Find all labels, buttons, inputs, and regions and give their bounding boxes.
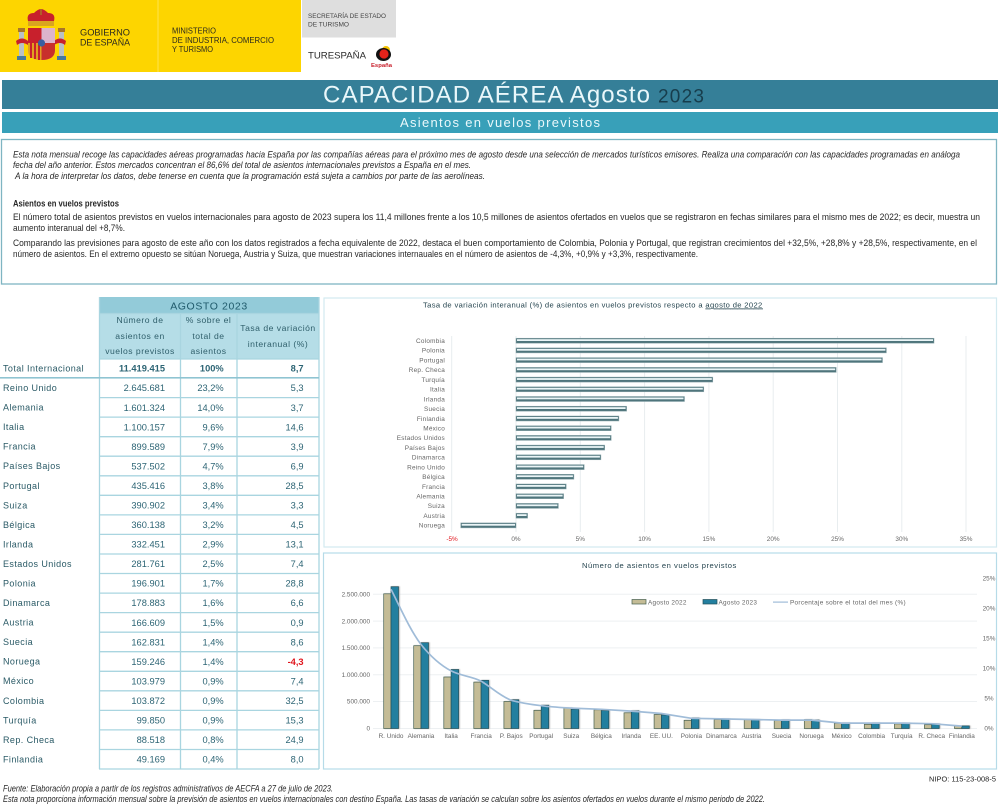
left axis labels: 500.000 bbox=[347, 699, 370, 706]
category labels: Portugal bbox=[529, 733, 553, 740]
icon: Spain sun logo: España bbox=[371, 63, 392, 69]
category labels: EE. UU. bbox=[650, 733, 673, 740]
text block: analysis paragraphs: aumento interanual del +8,7%. bbox=[13, 223, 125, 234]
category labels: Francia bbox=[470, 733, 492, 740]
category labels: Suiza bbox=[563, 733, 580, 740]
title bar: CAPACIDAD AÉREA Agosto bbox=[323, 82, 650, 108]
category labels: Austria bbox=[423, 513, 445, 520]
table rows: countries: 0,9% bbox=[202, 716, 224, 726]
table rows: countries: Italia bbox=[3, 422, 25, 432]
category labels: Noruega bbox=[419, 523, 445, 530]
text: Ministerio: DE INDUSTRIA, COMERCIO bbox=[172, 36, 274, 45]
table rows: countries: 0,9% bbox=[202, 696, 224, 706]
category labels: Austria bbox=[742, 733, 762, 740]
category labels: Dinamarca bbox=[412, 455, 445, 462]
legend bbox=[632, 599, 906, 606]
table header: AGOSTO 2023 bbox=[170, 300, 248, 312]
right axis labels: 15% bbox=[983, 636, 996, 643]
heading: Asientos en vuelos previstos: Asientos en vuelos previstos bbox=[13, 198, 119, 209]
table rows: countries: 0,8% bbox=[202, 735, 224, 745]
category labels: Italia bbox=[444, 733, 458, 740]
category labels: Rep. Checa bbox=[409, 367, 445, 374]
table rows: countries: 6,6 bbox=[291, 598, 304, 608]
icon: coat of arms of Spain bbox=[16, 9, 66, 60]
left axis labels bbox=[342, 592, 370, 733]
table rows: countries: 3,7 bbox=[291, 403, 304, 413]
table rows: countries: 3,8% bbox=[202, 481, 224, 491]
table rows: countries: 7,9% bbox=[202, 442, 224, 452]
table rows: countries: 178.883 bbox=[131, 598, 165, 608]
right axis labels: 20% bbox=[983, 606, 996, 613]
table rows: countries: 537.502 bbox=[131, 461, 165, 471]
table rows: countries: 0,9 bbox=[291, 618, 304, 628]
table rows: countries: 8,6 bbox=[291, 637, 304, 647]
left axis labels: 1.000.000 bbox=[342, 672, 370, 679]
panel: introductory text bbox=[2, 140, 996, 284]
x axis labels: 0% bbox=[511, 536, 521, 543]
table rows: countries: México bbox=[3, 676, 34, 686]
chart title: Número de asientos en vuelos previstos bbox=[582, 561, 737, 570]
right axis labels: 0% bbox=[984, 726, 994, 733]
title bar: 2023 bbox=[658, 86, 704, 108]
table rows: countries bbox=[3, 383, 304, 765]
x axis labels bbox=[446, 536, 973, 543]
table rows: countries: 435.416 bbox=[131, 481, 165, 491]
text block: italic introduction: A la hora de interpretar los datos, debe tenerse en cuenta que la programación está sujeta a cambios por parte de las aerolíneas. bbox=[14, 171, 485, 182]
legend: Agosto 2022 bbox=[648, 599, 687, 606]
table header: total de bbox=[192, 331, 225, 341]
title bar bbox=[2, 80, 998, 109]
category labels bbox=[379, 733, 975, 740]
table rows: countries: Suiza bbox=[3, 500, 28, 510]
right axis labels: 5% bbox=[984, 696, 994, 703]
table rows: countries: 49.169 bbox=[137, 755, 165, 765]
category labels: Suecia bbox=[424, 406, 445, 413]
data table bbox=[0, 297, 319, 769]
category labels: Turquía bbox=[891, 733, 913, 740]
x axis labels: 10% bbox=[638, 536, 651, 543]
table rows: countries: Rep. Checa bbox=[3, 735, 55, 745]
table rows: countries: Portugal bbox=[3, 481, 40, 491]
right axis labels: 10% bbox=[983, 666, 996, 673]
category labels: México bbox=[831, 733, 852, 740]
text: Gobierno de España: GOBIERNO bbox=[80, 26, 130, 38]
category labels: Francia bbox=[422, 484, 445, 491]
table rows: countries: 1,4% bbox=[202, 637, 224, 647]
left axis labels: 2.000.000 bbox=[342, 618, 370, 625]
NIPO code: NIPO: 115-23-008-5 bbox=[929, 774, 996, 784]
text block: analysis paragraphs bbox=[13, 212, 980, 260]
table rows: countries: 332.451 bbox=[131, 540, 165, 550]
table rows: countries: 2,5% bbox=[202, 559, 224, 569]
table rows: countries: 899.589 bbox=[131, 442, 165, 452]
logo: Turespaña: TURESPAÑA bbox=[308, 50, 367, 60]
category labels: Polonia bbox=[681, 733, 703, 740]
header: Secretaría de Estado box: SECRETARÍA DE ESTADO bbox=[308, 11, 386, 20]
x axis labels: 35% bbox=[960, 536, 973, 543]
panel: horizontal bar chart of year-on-year change bbox=[324, 298, 996, 547]
table row: Total Internacional: 100% bbox=[200, 364, 224, 374]
table rows: countries: Turquía bbox=[3, 715, 37, 725]
category labels: Bélgica bbox=[591, 733, 612, 740]
line: percentage of monthly total bbox=[391, 589, 962, 726]
table rows: countries: 281.761 bbox=[131, 559, 165, 569]
panel: column and line chart of seats bbox=[324, 553, 996, 769]
table rows: countries: 162.831 bbox=[131, 637, 165, 647]
table rows: countries: 360.138 bbox=[131, 520, 165, 530]
category labels: Portugal bbox=[419, 357, 445, 364]
category labels: Noruega bbox=[799, 733, 824, 740]
table rows: countries: Bélgica bbox=[3, 520, 35, 530]
table rows: countries: Suecia bbox=[3, 637, 33, 647]
category labels: Finlandia bbox=[949, 733, 975, 740]
table rows: countries: 9,6% bbox=[202, 422, 224, 432]
left axis labels: 0 bbox=[366, 726, 370, 733]
category labels: Colombia bbox=[416, 338, 445, 345]
table rows: countries: 1.601.324 bbox=[124, 403, 165, 413]
table rows: countries: -4,3 bbox=[288, 657, 304, 667]
table rows: countries: 6,9 bbox=[291, 461, 304, 471]
table rows: countries: 8,0 bbox=[291, 755, 304, 765]
table rows: countries: Polonia bbox=[3, 578, 36, 588]
footnotes: Fuente: Elaboración propia a partir de los registros administrativos de AECFA a 27 de julio de 2023. bbox=[3, 784, 333, 794]
table rows: countries: Irlanda bbox=[3, 539, 33, 549]
table rows: countries: 2,9% bbox=[202, 540, 224, 550]
x axis labels: 5% bbox=[576, 536, 585, 543]
table rows: countries: 23,2% bbox=[197, 383, 224, 393]
table rows: countries: 28,8 bbox=[285, 579, 304, 589]
table rows: countries: 99.850 bbox=[137, 716, 165, 726]
category labels: Finlandia bbox=[417, 416, 445, 423]
category labels: Alemania bbox=[416, 494, 445, 500]
category labels: Dinamarca bbox=[706, 733, 737, 740]
table rows: countries: 24,9 bbox=[285, 735, 304, 745]
table rows: countries: 28,5 bbox=[285, 481, 304, 491]
table rows: countries: 88.518 bbox=[137, 735, 165, 745]
table rows: countries: 196.901 bbox=[131, 579, 165, 589]
category labels bbox=[397, 338, 445, 530]
header: Secretaría de Estado box: DE TURISMO bbox=[308, 21, 349, 28]
table rows: countries: Austria bbox=[3, 618, 34, 628]
table rows: countries: Finlandia bbox=[3, 754, 43, 764]
category labels: México bbox=[423, 426, 445, 432]
text: Ministerio: Y TURISMO bbox=[172, 45, 213, 54]
table rows: countries: 15,3 bbox=[285, 716, 304, 726]
table rows: countries: 0,4% bbox=[202, 755, 224, 765]
category labels: Polonia bbox=[422, 348, 445, 355]
category labels: Irlanda bbox=[622, 733, 642, 740]
table rows: countries: 13,1 bbox=[285, 540, 304, 550]
category labels: Reino Unido bbox=[407, 464, 445, 471]
table header: % sobre el bbox=[186, 315, 231, 325]
logo: Turespaña bbox=[308, 46, 392, 69]
table rows: countries: 3,3 bbox=[291, 500, 304, 510]
table rows: countries: 0,9% bbox=[202, 676, 224, 686]
category labels: R. Unido bbox=[379, 733, 404, 740]
table rows: countries: 103.979 bbox=[131, 676, 165, 686]
text block: italic introduction bbox=[13, 150, 960, 182]
table header: vuelos previstos bbox=[105, 346, 175, 356]
legend: Agosto 2023 bbox=[718, 599, 757, 606]
table rows: countries: 1,4% bbox=[202, 657, 224, 667]
subtitle bar bbox=[2, 112, 998, 133]
text: Ministerio: MINISTERIO bbox=[172, 26, 216, 36]
table rows: countries: 7,4 bbox=[291, 559, 304, 569]
table rows: countries: 4,7% bbox=[202, 461, 224, 471]
left axis labels: 2.500.000 bbox=[342, 592, 370, 598]
table rows: countries: Reino Unido bbox=[3, 383, 57, 393]
table rows: countries: 3,2% bbox=[202, 520, 224, 530]
table rows: countries: Alemania bbox=[3, 403, 44, 413]
table header: Número de bbox=[116, 315, 164, 325]
table rows: countries: Estados Unidos bbox=[3, 559, 72, 569]
text block: italic introduction: fecha del año anterior. Estos mercados concentran el 86,6% del total de asientos internacionales previstos a España en el mes. bbox=[13, 160, 471, 171]
table row: Total Internacional: 8,7 bbox=[291, 364, 304, 374]
table header: Tasa de variación bbox=[240, 323, 316, 333]
table header: asientos en bbox=[115, 331, 165, 341]
table rows: countries: 4,5 bbox=[291, 520, 304, 530]
chart title: Tasa de variación interanual (%) de asientos en vuelos previstos respecto a agosto de 2022 bbox=[423, 300, 763, 310]
category labels: Turquía bbox=[421, 377, 445, 384]
category labels: R. Checa bbox=[918, 733, 945, 740]
table rows: countries: 166.609 bbox=[131, 618, 165, 628]
text: Gobierno de España: DE ESPAÑA bbox=[80, 36, 131, 48]
table row: Total Internacional: 11.419.415 bbox=[119, 364, 165, 374]
table rows: countries: 7,4 bbox=[291, 676, 304, 686]
table rows: countries: 390.902 bbox=[131, 500, 165, 510]
category labels: Estados Unidos bbox=[397, 435, 445, 442]
table rows: countries: 5,3 bbox=[291, 383, 304, 393]
category labels: P. Bajos bbox=[500, 733, 523, 740]
table rows: countries: 14,0% bbox=[197, 403, 224, 413]
subtitle bar: Asientos en vuelos previstos bbox=[400, 115, 600, 130]
table rows: countries: Francia bbox=[3, 442, 36, 452]
table header: asientos bbox=[190, 346, 227, 356]
category labels: Suiza bbox=[428, 503, 445, 510]
table rows: countries: 1,5% bbox=[202, 618, 224, 628]
table row: Total Internacional: Total Internacional bbox=[3, 364, 84, 374]
category labels: Colombia bbox=[858, 733, 886, 740]
category labels: Bélgica bbox=[422, 474, 445, 481]
text: Ministerio bbox=[172, 26, 274, 54]
category labels: Países Bajos bbox=[405, 445, 445, 452]
footnotes bbox=[3, 784, 765, 804]
table rows: countries: Dinamarca bbox=[3, 598, 50, 608]
category labels: Suecia bbox=[772, 733, 792, 740]
legend: Porcentaje sobre el total del mes (%) bbox=[790, 599, 906, 606]
table rows: countries: 103.872 bbox=[131, 696, 165, 706]
table rows: countries: 3,9 bbox=[291, 442, 304, 452]
table rows: countries: 1.100.157 bbox=[124, 422, 165, 432]
right axis labels: 25% bbox=[983, 576, 996, 583]
right axis labels bbox=[983, 576, 996, 733]
table rows: countries: 1,7% bbox=[202, 579, 224, 589]
table row: Total Internacional bbox=[3, 364, 304, 374]
table rows: countries: 3,4% bbox=[202, 500, 224, 510]
table rows: countries: 32,5 bbox=[285, 696, 304, 706]
category labels: Italia bbox=[430, 387, 445, 394]
table rows: countries: 2.645.681 bbox=[124, 383, 165, 393]
text: Gobierno de España bbox=[80, 26, 131, 48]
x axis labels: 15% bbox=[703, 536, 716, 543]
x axis labels: 25% bbox=[831, 536, 844, 543]
header: Secretaría de Estado box bbox=[302, 0, 396, 38]
table rows: countries: 159.246 bbox=[131, 657, 165, 667]
table header: interanual (%) bbox=[248, 339, 308, 349]
category labels: Alemania bbox=[408, 733, 435, 740]
x axis labels: 30% bbox=[895, 536, 909, 543]
table header bbox=[99, 297, 319, 359]
table rows: countries: Países Bajos bbox=[3, 461, 61, 471]
bars bbox=[461, 338, 934, 528]
left axis labels: 1.500.000 bbox=[342, 645, 370, 652]
header: government banner bbox=[0, 0, 301, 72]
table rows: countries: Colombia bbox=[3, 696, 44, 706]
table rows: countries: 1,6% bbox=[202, 598, 224, 608]
columns: August 2022 and August 2023 bbox=[384, 587, 969, 728]
text block: analysis paragraphs: número de asientos. En el extremo opuesto se sitúan Noruega, Austria y Suiza, que muestran variaciones internauales en el número de asientos de -4,3%, +0,9% y +3,3%, respectivamente. bbox=[13, 249, 698, 260]
x axis labels: -5% bbox=[446, 536, 458, 543]
table rows: countries: 14,6 bbox=[285, 422, 304, 432]
category labels: Irlanda bbox=[424, 396, 445, 403]
x axis labels: 20% bbox=[767, 536, 780, 543]
table rows: countries: Noruega bbox=[3, 657, 40, 667]
